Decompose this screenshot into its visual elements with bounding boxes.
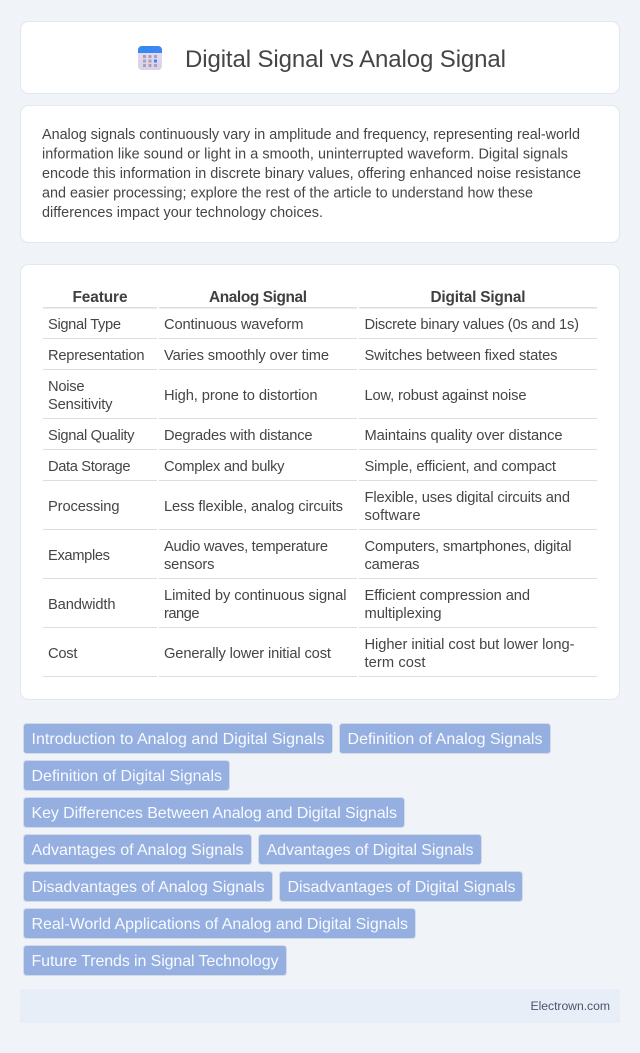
intro paragraph: encode this information in discrete binary values, offering enhanced noise resistance: [42, 166, 581, 182]
tag: disadvantages of analog: Disadvantages of Analog Signals: [32, 879, 264, 896]
tag: key differences: [24, 798, 404, 828]
tag: advantages of digital: Advantages of Digital Signals: [266, 842, 474, 859]
row: noise sensitivity: [48, 379, 526, 413]
row: noise sensitivity: Noise: [48, 379, 84, 395]
row: representation: Switches between fixed states: [364, 348, 558, 364]
row: examples: cameras: [364, 557, 420, 573]
row: signal type: [48, 317, 579, 333]
row: examples: Audio waves, temperature: [164, 539, 328, 555]
intro paragraph: and easier processing; explore the rest of the article to understand how these: [42, 186, 533, 202]
row: signal type: Continuous waveform: [164, 317, 304, 333]
row: signal quality: Maintains quality over distance: [364, 428, 562, 444]
row: representation: Varies smoothly over time: [164, 348, 329, 364]
row: cost: term cost: [364, 655, 426, 671]
intro paragraph: Analog signals continuously vary in amplitude and frequency, representing real-world: [42, 127, 580, 143]
row: representation: Representation: [48, 348, 144, 364]
row: noise sensitivity: High, prone to distortion: [164, 388, 318, 404]
row: data storage: Complex and bulky: [164, 459, 285, 475]
row: bandwidth: multiplexing: [364, 606, 442, 622]
intro paragraph: [42, 127, 581, 221]
row: processing: Flexible, uses digital circuits and: [364, 490, 570, 506]
panel: introduction: [20, 106, 620, 242]
tag: future trends: [24, 946, 286, 976]
row: cost: Cost: [48, 646, 78, 662]
row: processing: Less flexible, analog circuits: [164, 499, 343, 515]
tag: future trends: Future Trends in Signal Technology: [32, 953, 278, 970]
row: data storage: Simple, efficient, and compact: [364, 459, 556, 475]
tag: definition of digital: Definition of Digital Signals: [32, 768, 222, 785]
row: examples: sensors: [164, 557, 214, 573]
row: data storage: [48, 459, 556, 475]
row: processing: software: [364, 508, 420, 524]
tag: disadvantages of digital: [280, 872, 522, 902]
footer credit: Electrown.com: [530, 999, 610, 1013]
tag: real-world applications: Real-World Applications of Analog and Digital Signals: [32, 916, 408, 933]
icon: calendar grid: [138, 46, 162, 70]
row: noise sensitivity: Low, robust against noise: [364, 388, 526, 404]
row: processing: Processing: [48, 499, 120, 515]
row: signal type: Signal Type: [48, 317, 121, 333]
tag: definition of analog: Definition of Analog Signals: [348, 731, 542, 748]
tag: disadvantages of digital: Disadvantages of Digital Signals: [288, 879, 516, 896]
row: cost: Generally lower initial cost: [164, 646, 331, 662]
tag: advantages of analog: Advantages of Analog Signals: [32, 842, 244, 859]
tag: advantages of digital: [258, 834, 482, 864]
row: signal quality: Degrades with distance: [164, 428, 312, 444]
panel: title header: [20, 22, 620, 94]
row: bandwidth: Bandwidth: [48, 597, 116, 613]
intro paragraph: differences impact your technology choices.: [42, 205, 323, 221]
footer: [20, 989, 620, 1023]
intro paragraph: information like sound or light in a smooth, uninterrupted waveform. Digital signals: [42, 146, 568, 162]
table header row: Digital Signal: [430, 289, 526, 306]
row: signal quality: Signal Quality: [48, 428, 135, 444]
title: Digital Signal vs Analog Signal: [185, 46, 506, 73]
row: examples: Computers, smartphones, digital: [364, 539, 572, 555]
table header row: Feature: [72, 289, 128, 306]
row: bandwidth: [48, 588, 530, 622]
table header row: Analog Signal: [209, 289, 307, 306]
row: representation: [48, 348, 558, 364]
row: examples: Examples: [48, 548, 110, 564]
row: data storage: Data Storage: [48, 459, 130, 475]
row: cost: [48, 637, 575, 671]
panel: comparison table: [20, 264, 620, 700]
row: signal type: Discrete binary values (0s and 1s): [364, 317, 579, 333]
tag: disadvantages of analog: [24, 872, 272, 902]
tag: introduction: Introduction to Analog and Digital Signals: [32, 731, 324, 748]
row: processing: [48, 490, 570, 524]
table header row: [72, 289, 526, 306]
tag: introduction: [24, 724, 332, 754]
tag: key differences: Key Differences Between Analog and Digital Signals: [32, 805, 397, 822]
topic tags: [24, 724, 550, 976]
row: bandwidth: Efficient compression and: [364, 588, 530, 604]
tag: advantages of analog: [24, 834, 252, 864]
row: bandwidth: Limited by continuous signal: [164, 588, 346, 604]
row: noise sensitivity: Sensitivity: [48, 397, 113, 413]
tag: definition of digital: [24, 760, 230, 790]
row: cost: Higher initial cost but lower long-: [364, 637, 575, 653]
row: bandwidth: range: [164, 606, 200, 622]
row: examples: [48, 539, 572, 573]
tag: real-world applications: [24, 908, 416, 938]
tag: definition of analog: [340, 724, 550, 754]
row: signal quality: [48, 428, 562, 444]
